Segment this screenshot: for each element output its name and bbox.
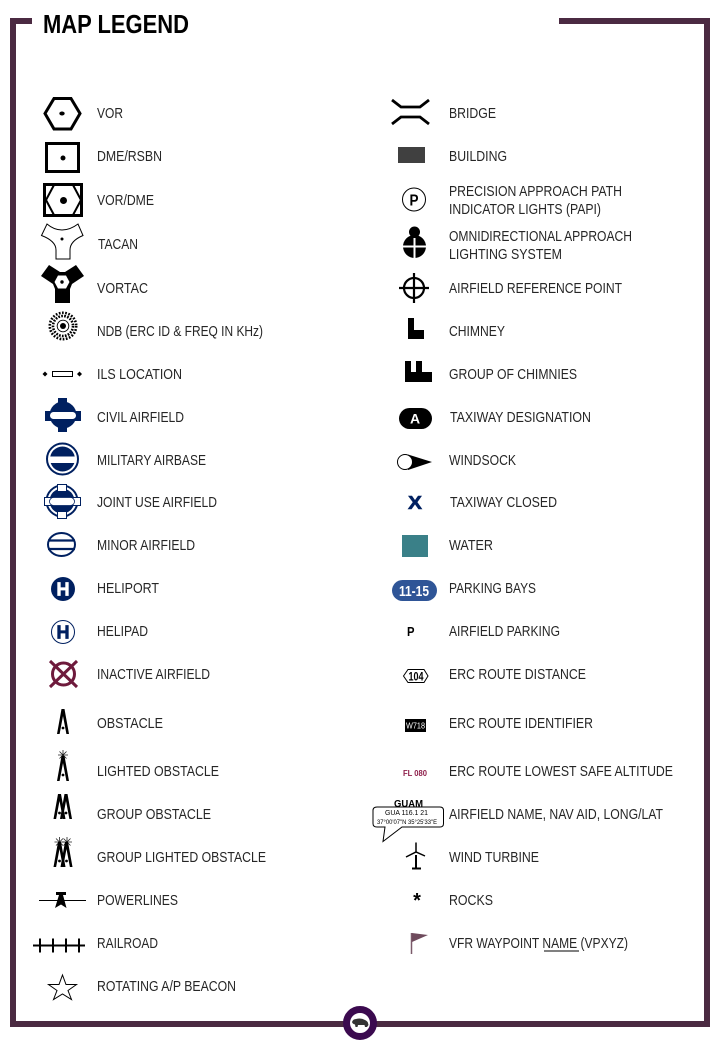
label: omnidirectional second line: LIGHTING SYSTEM	[449, 247, 562, 263]
icon: ERC route distance	[404, 670, 428, 684]
label: GROUP OF CHIMNIES: GROUP OF CHIMNIES	[449, 367, 577, 383]
icon: airfield callout	[373, 799, 444, 842]
icon: group of chimneys	[405, 361, 432, 382]
label: GROUP LIGHTED OBSTACLE: GROUP LIGHTED OBSTACLE	[97, 850, 266, 866]
title: MAP LEGEND	[43, 9, 189, 39]
label: DME/RSBN: DME/RSBN	[97, 149, 162, 165]
label: VFR WAYPOINT: VFR WAYPOINT NAME (VPXYZ)	[449, 936, 628, 952]
icon: railroad	[33, 938, 85, 952]
label: NDB: NDB (ERC ID & FREQ IN KHz)	[97, 324, 263, 340]
icon: TACAN	[42, 224, 83, 259]
icon: airfield callout: GUAM	[394, 799, 423, 810]
icon: minor airfield	[48, 533, 75, 556]
icon: group obstacle	[54, 794, 72, 819]
icon: helipad: H	[56, 622, 70, 642]
icon: civil airfield	[45, 398, 81, 432]
label: RAILROAD: RAILROAD	[97, 936, 158, 952]
panel: left legend column	[33, 98, 266, 1000]
label: TACAN: TACAN	[98, 237, 138, 253]
icon: lighted obstacle	[57, 750, 69, 781]
icon: parking bays	[392, 580, 437, 601]
icon: ERC route distance: 104	[408, 672, 424, 684]
icon: water	[402, 535, 428, 557]
label: AIRFIELD PARKING: AIRFIELD PARKING	[449, 624, 560, 640]
label: CIVIL AIRFIELD: CIVIL AIRFIELD	[97, 410, 184, 426]
icon: PAPI	[402, 188, 426, 211]
label: CHIMNEY: CHIMNEY	[449, 324, 505, 340]
label: ILS LOCATION: ILS LOCATION	[97, 367, 182, 383]
icon: group lighted obstacle	[54, 837, 72, 867]
icon: obstacle	[57, 709, 69, 734]
label: WIND TURBINE: WIND TURBINE	[449, 850, 539, 866]
label: BRIDGE: BRIDGE	[449, 106, 496, 122]
icon: lowest safe altitude: FL 080	[403, 769, 428, 778]
icon: bridge	[392, 100, 429, 124]
label: MINOR AIRFIELD: MINOR AIRFIELD	[97, 538, 195, 554]
icon: taxiway designation: A	[410, 410, 420, 426]
icon: windsock	[398, 454, 432, 470]
icon: ERC route identifier	[405, 719, 426, 732]
icon: airfield reference point	[399, 273, 429, 303]
label: ERC ROUTE LOWEST SAFE ALTITUDE: ERC ROUTE LOWEST SAFE ALTITUDE	[449, 764, 673, 780]
label: WINDSOCK: WINDSOCK	[449, 453, 516, 469]
label: TAXIWAY CLOSED: TAXIWAY CLOSED	[450, 495, 557, 511]
icon: omnidirectional approach lighting	[403, 226, 426, 258]
icon: inactive airfield	[50, 661, 77, 687]
label: HELIPORT: HELIPORT	[97, 581, 159, 597]
icon: building	[398, 147, 425, 163]
label: ROCKS: ROCKS	[449, 893, 493, 909]
icon: rocks: *	[413, 890, 421, 912]
icon: chimney	[408, 318, 424, 339]
label: VOR: VOR	[97, 106, 123, 122]
label: INACTIVE AIRFIELD: INACTIVE AIRFIELD	[97, 667, 210, 683]
label: POWERLINES: POWERLINES	[97, 893, 178, 909]
icon: ILS location	[42, 372, 82, 376]
icon: heliport	[51, 577, 75, 601]
icon: parking bays: 11-15	[399, 583, 429, 600]
label: GROUP OBSTACLE: GROUP OBSTACLE	[97, 807, 211, 823]
icon: military airbase	[47, 444, 78, 474]
icon: PAPI: P	[410, 192, 419, 210]
label: AIRFIELD REFERENCE POINT: AIRFIELD REFERENCE POINT	[449, 281, 622, 297]
label: JOINT USE AIRFIELD: JOINT USE AIRFIELD	[97, 495, 217, 511]
label: WATER: WATER	[449, 538, 493, 554]
icon: DME/RSBN	[46, 144, 78, 172]
label: ROTATING A/P BEACON: ROTATING A/P BEACON	[97, 979, 236, 995]
panel: right legend column	[373, 100, 673, 954]
label: LIGHTED OBSTACLE: LIGHTED OBSTACLE	[97, 764, 219, 780]
logo badge	[346, 1010, 374, 1036]
icon: airfield callout: GUA 116.1 21	[385, 808, 428, 817]
label: PAPI second line: INDICATOR LIGHTS (PAPI)	[449, 202, 601, 218]
icon: VORTAC	[41, 265, 84, 303]
icon: airfield parking: P	[407, 624, 415, 639]
label: VOR/DME: VOR/DME	[97, 193, 154, 209]
label: TAXIWAY DESIGNATION: TAXIWAY DESIGNATION	[450, 410, 591, 426]
icon: helipad	[52, 620, 74, 644]
icon: VFR waypoint flag	[412, 933, 428, 954]
label: BUILDING: BUILDING	[449, 149, 507, 165]
label: PARKING BAYS: PARKING BAYS	[449, 581, 536, 597]
label: PAPI: PRECISION APPROACH PATH	[449, 184, 622, 200]
label: VORTAC: VORTAC	[97, 281, 148, 297]
icon: heliport: H	[56, 580, 70, 600]
icon: wind turbine	[406, 842, 425, 868]
icon: joint use airfield	[44, 484, 80, 518]
icon: taxiway closed: X	[408, 493, 422, 513]
label: MILITARY AIRBASE: MILITARY AIRBASE	[97, 453, 206, 469]
icon: VOR	[45, 98, 80, 129]
label: omnidirectional: OMNIDIRECTIONAL APPROACH	[449, 229, 632, 245]
icon: ERC route identifier: W718	[406, 722, 425, 730]
label: ERC ROUTE IDENTIFIER: ERC ROUTE IDENTIFIER	[449, 716, 593, 732]
icon: NDB	[50, 313, 76, 339]
icon: powerlines	[39, 892, 86, 908]
icon: taxiway designation	[399, 408, 432, 429]
icon: airfield callout: 37°00'07"N 35°25'33"E	[377, 820, 437, 826]
label: ERC ROUTE DISTANCE: ERC ROUTE DISTANCE	[449, 667, 586, 683]
label: AIRFIELD NAME: AIRFIELD NAME, NAV AID, LONG/LAT	[449, 807, 663, 823]
icon: VOR/DME	[44, 184, 82, 216]
icon: rotating beacon star	[48, 975, 76, 1000]
label: OBSTACLE: OBSTACLE	[97, 716, 163, 732]
label: HELIPAD: HELIPAD	[97, 624, 148, 640]
